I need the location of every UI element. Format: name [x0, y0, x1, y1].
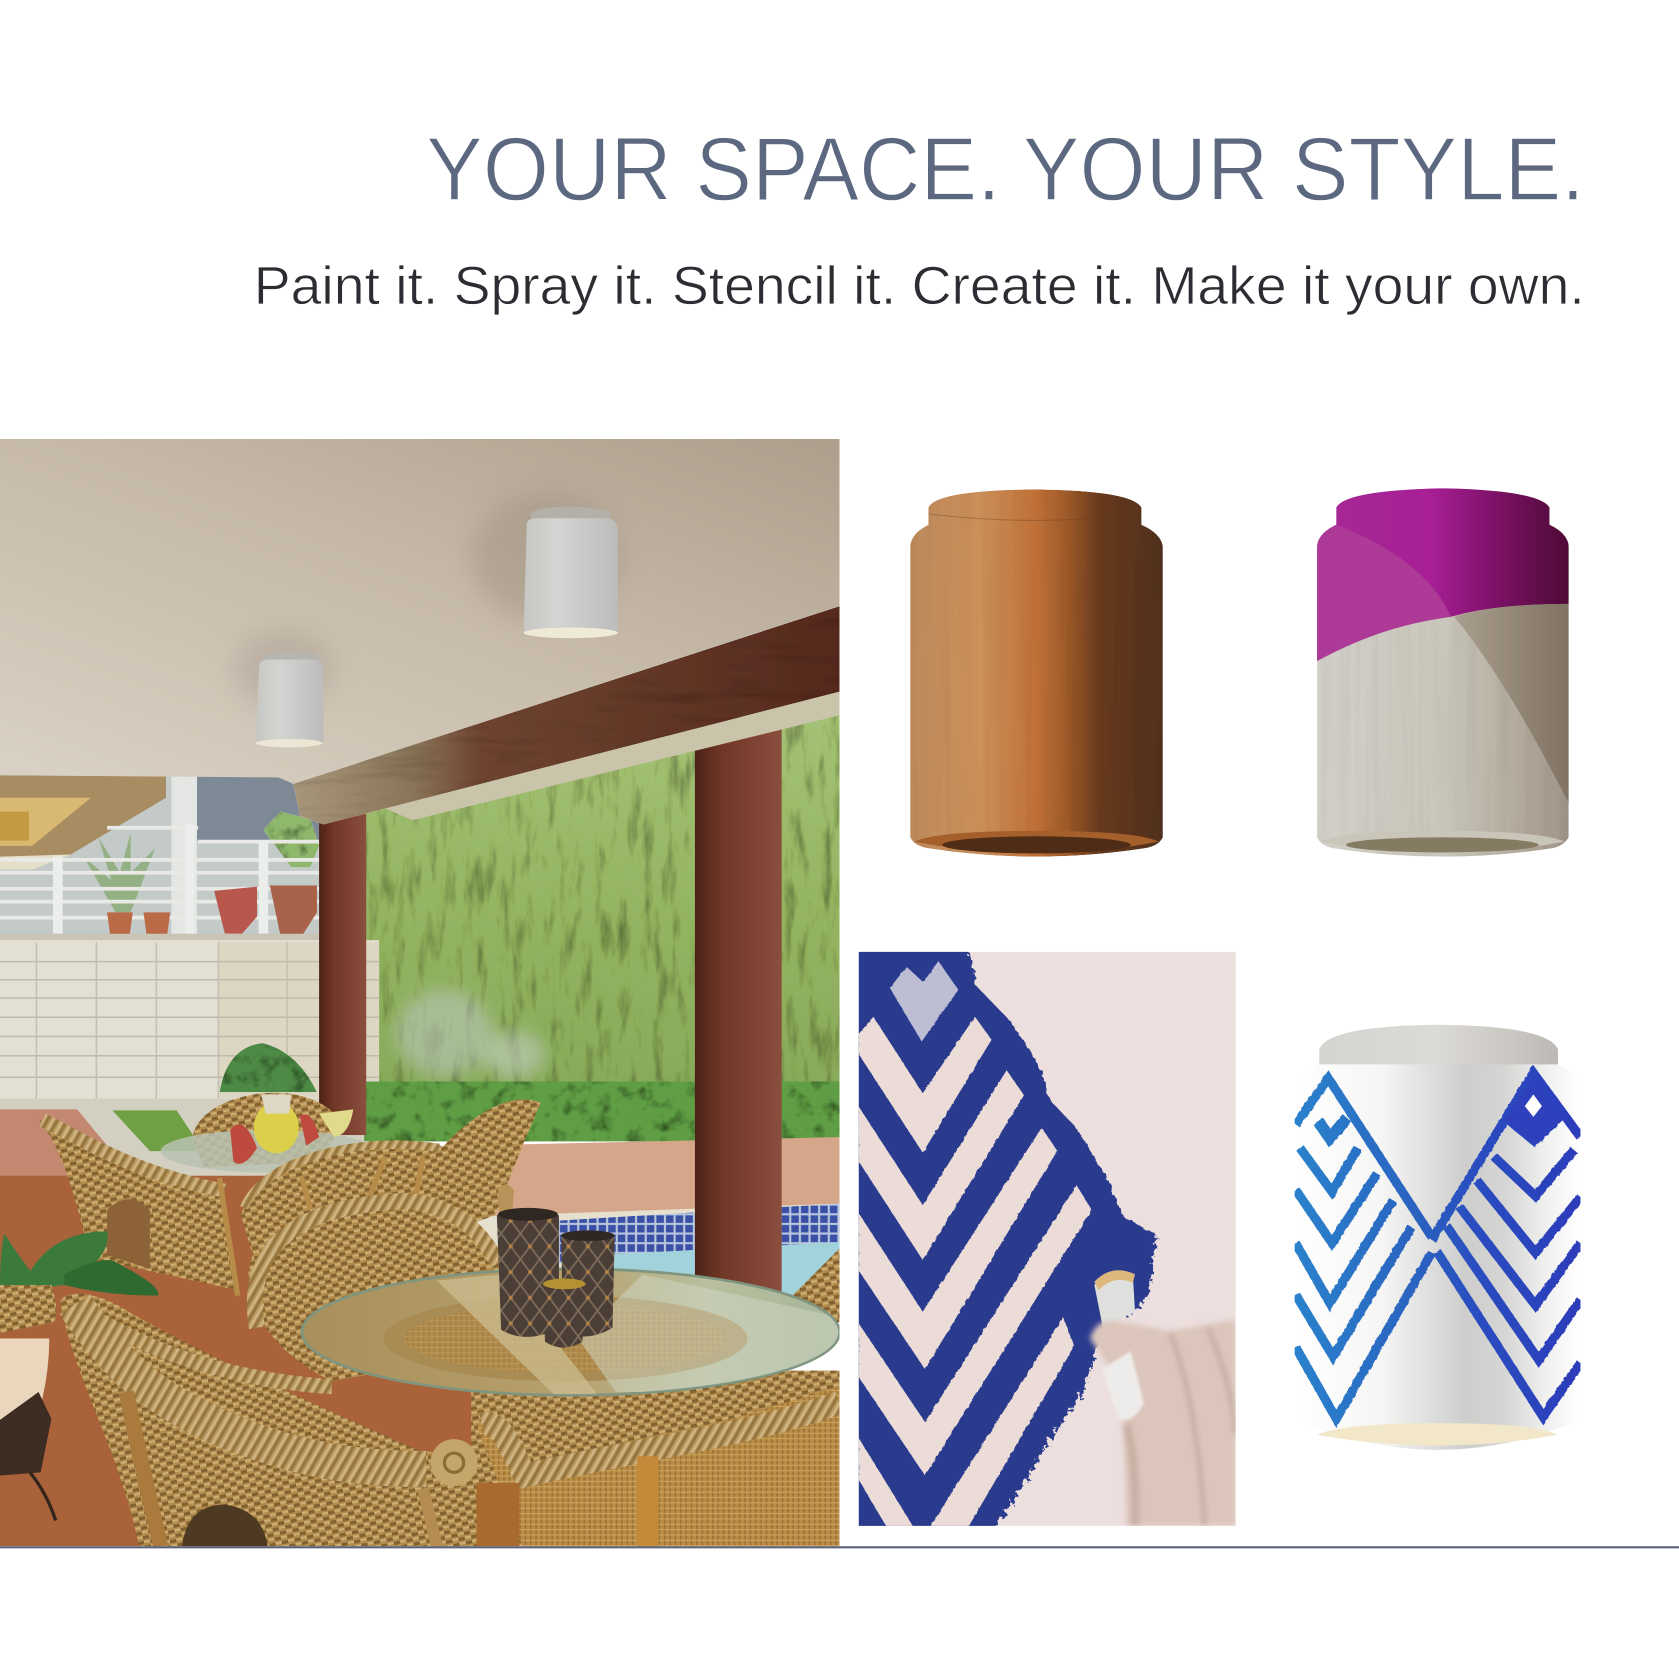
ceiling lamp large — [524, 506, 618, 638]
pool deck — [440, 1137, 840, 1216]
product: magenta and grey lamp — [1312, 482, 1574, 867]
wooden posts — [319, 717, 782, 1296]
bottom rule — [0, 1546, 1679, 1548]
brush tip — [1094, 1270, 1135, 1328]
panel: patio photo with ceiling lamps — [0, 439, 840, 1546]
floor — [0, 1176, 493, 1546]
lawn and pavers — [0, 1098, 364, 1176]
beam — [293, 606, 839, 825]
hedge — [364, 1081, 840, 1141]
white lamp collar — [1319, 1025, 1558, 1067]
far chair on right side of table — [782, 1249, 840, 1322]
garden wall — [0, 940, 379, 1101]
magenta lamp opening — [1321, 831, 1564, 853]
magenta lamp inner — [1346, 837, 1539, 852]
blue chevron pattern — [1296, 1073, 1580, 1419]
grey shadow facet — [1454, 604, 1574, 814]
product: stencilled white lamp — [1295, 1025, 1580, 1450]
panel: stencil photo — [852, 947, 1236, 1531]
foliage: willow trees — [362, 685, 840, 1114]
subtitle: Paint it. Spray it. Stencil it. Create it. Make it your own. — [254, 257, 1585, 316]
stencil stripes — [859, 961, 1092, 1527]
plant — [0, 1231, 159, 1296]
middle wicker chair — [248, 1199, 503, 1381]
far right chair behind table — [664, 1371, 840, 1435]
front right wicker chair — [477, 1387, 840, 1546]
magenta light facet — [1312, 525, 1451, 664]
blue paint area — [852, 947, 1156, 1531]
white lamp opening — [1317, 1423, 1557, 1446]
candle lanterns — [497, 1208, 615, 1348]
terracotta lamp inner — [942, 836, 1131, 853]
back wicker chairs and table — [39, 1093, 541, 1296]
magenta lamp base — [1312, 482, 1574, 867]
front left wicker chair — [60, 1294, 478, 1546]
terracotta lamp opening — [914, 831, 1159, 853]
swimming pool — [477, 1204, 840, 1296]
hand — [1090, 1319, 1236, 1526]
fruit and jug on far table — [230, 1094, 353, 1164]
ceiling lamp small — [256, 651, 323, 747]
gaps in foliage — [396, 990, 544, 1078]
title: YOUR SPACE. YOUR STYLE. — [426, 120, 1585, 220]
white lamp body — [1295, 1064, 1580, 1450]
side table basket and stand — [0, 1285, 56, 1521]
right diamond — [1432, 1073, 1580, 1417]
brush handle — [1103, 1351, 1144, 1420]
heart — [890, 961, 958, 1042]
glass table — [302, 1269, 840, 1397]
background building and railing — [0, 771, 332, 940]
magenta painted area — [1312, 482, 1574, 664]
pedestal — [471, 1381, 669, 1546]
product: terracotta lamp — [910, 489, 1163, 857]
lamp shadows on ceiling — [235, 493, 621, 708]
small white diamond — [1525, 1094, 1542, 1117]
ceiling — [0, 439, 840, 784]
left diamond — [1296, 1078, 1432, 1419]
